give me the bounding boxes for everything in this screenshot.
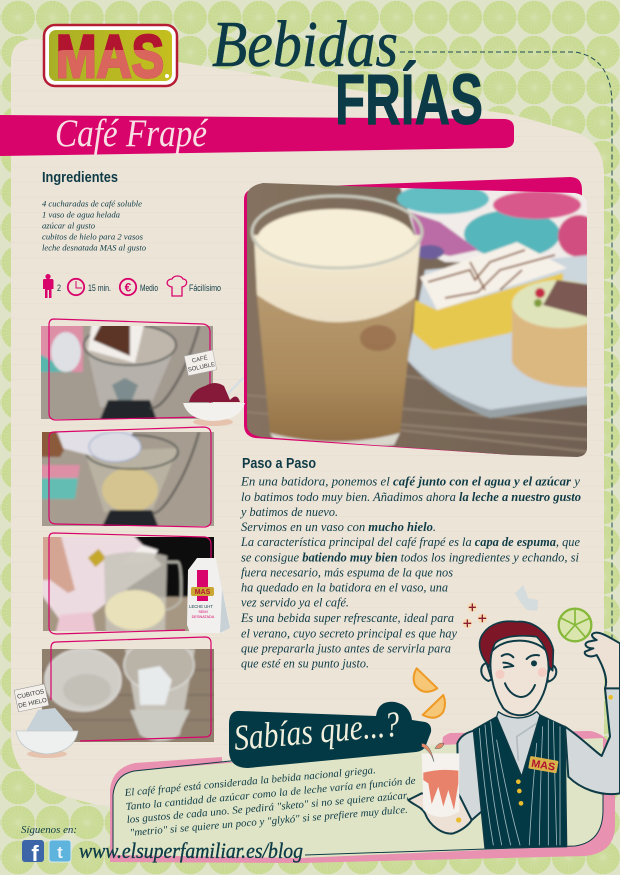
glass body: coffee — [256, 285, 416, 442]
note text: El café frapé está considerada la bebida nacional griega. — [123, 765, 376, 799]
napkin — [400, 186, 595, 265]
ingredients list: cubitos de hielo para 2 vasos — [42, 232, 144, 242]
milk carton: LECHE UHT — [189, 604, 213, 609]
pink frame — [244, 177, 582, 455]
right arm — [565, 687, 620, 794]
icon: orange slice — [423, 695, 445, 718]
milk carton: SEMI — [198, 610, 208, 614]
dashed route line — [400, 52, 612, 640]
heading: Sabías que: Sabías que...? — [232, 704, 401, 758]
note text — [123, 765, 416, 839]
step-by-step text: La característica principal del café frapé es la capa de espuma, que — [240, 535, 580, 549]
plate — [407, 255, 590, 410]
label: Síguenos en: Síguenos en: — [21, 824, 77, 836]
milk carton — [187, 558, 230, 633]
vest buttons — [516, 779, 523, 806]
recipe info icons: Medio — [140, 283, 158, 293]
step photo 2: pouring water — [37, 427, 219, 531]
step-by-step text: En una batidora, ponemos el café junto con el agua y el azúcar y — [240, 475, 580, 489]
ingredients list: leche desnatada MAS al gusto — [42, 242, 147, 252]
step-by-step text: que esté en su punto justo. — [241, 656, 369, 670]
step-by-step text: Servimos en un vaso con mucho hielo. — [241, 520, 436, 534]
icon: sugar cube — [515, 585, 538, 611]
icon: sparkles — [463, 603, 487, 628]
recipe info icons: 15 min. — [88, 283, 111, 293]
note text: Tanto la cantidad de azúcar como la de leche varía en función de — [125, 776, 416, 813]
recipe info icons: 2 — [57, 283, 61, 293]
website url: www.elsuperfamiliar.es/blog — [79, 838, 303, 863]
milk carton: DESNATADA — [192, 615, 215, 619]
pink backing — [110, 731, 615, 863]
step photo 1: coffee in blender — [36, 319, 218, 424]
MAS logo: MAS — [56, 23, 164, 90]
label: cubitos de hielo with bowl — [14, 684, 78, 758]
step frame — [49, 533, 211, 634]
step-by-step text: Es una bebida super refrescante, ideal para — [240, 611, 454, 625]
title: Bebidas: Bebidas — [212, 8, 398, 81]
round cake — [512, 305, 595, 387]
pale green note — [113, 738, 603, 858]
icon: person — [43, 274, 54, 298]
vest pinstripes — [479, 720, 560, 845]
label: cubitos de hielo with bowl: DE HIELO — [18, 697, 48, 710]
head — [481, 663, 556, 682]
ingredients list: 1 vaso de agua helada — [42, 210, 120, 220]
foam — [254, 235, 421, 322]
step frame — [51, 637, 211, 741]
label: café soluble with bowl: CAFÉ — [191, 354, 208, 365]
recipe info icons — [43, 274, 221, 298]
label: café soluble with bowl — [183, 350, 245, 426]
ingredients list: 4 cucharadas de café soluble — [42, 198, 142, 208]
step-by-step text: fuera necesario, más espuma de la que nos — [241, 566, 453, 580]
note text: los gustos de cada uno. Se pedirá "sketo" si no se quiere azúcar, — [126, 790, 409, 826]
ingredients list: azúcar al gusto — [42, 220, 96, 230]
dark title box — [229, 702, 431, 768]
step-by-step text: y batimos de nuevo. — [239, 505, 338, 519]
icon: facebook: f — [31, 841, 39, 866]
left sleeve — [457, 731, 483, 822]
panel: Sabías que box — [110, 702, 615, 863]
step photo 4: ice cubes — [37, 637, 219, 747]
step-by-step text: ha quedado en la batidora en el vaso, una — [241, 581, 448, 595]
hero panel: iced coffee photo with pink frame — [244, 177, 587, 457]
neck and collar — [505, 703, 535, 718]
label: cubitos de hielo with bowl: CUBITOS — [17, 688, 45, 701]
note text: "metrio" si se quiere un poco y "glykó" si se prefiere muy dulce. — [129, 805, 408, 839]
step frame — [49, 427, 211, 527]
milk carton: MAS — [195, 589, 211, 596]
name badge: MAS — [530, 758, 556, 774]
heading: Paso a Paso: Paso a Paso — [242, 456, 316, 472]
vest — [473, 715, 567, 848]
step-by-step text: vez servido ya el café. — [241, 596, 349, 610]
label: café soluble with bowl: SOLUBLE — [187, 362, 216, 374]
pink banner — [0, 115, 514, 156]
footer: social links — [21, 824, 77, 866]
icon: twitter: t — [57, 843, 63, 862]
icon: chef hat — [167, 276, 187, 296]
banner title: Café Frapé: Café Frapé — [55, 112, 208, 155]
character: winking waiter with drink — [408, 585, 620, 848]
heading: Ingredientes: Ingredientes — [42, 170, 118, 186]
step-by-step text: lo batimos todo muy bien. Añadimos ahora la leche a nuestro gusto — [241, 490, 581, 504]
icon: lime slice — [559, 609, 591, 641]
title: FRÍAS: FRÍAS — [335, 61, 483, 140]
hair — [480, 621, 553, 671]
hand and drink — [408, 793, 472, 834]
recipe info icons: Fácilísimo — [189, 283, 221, 293]
step-by-step text: que prepararla justo antes de servirla para — [241, 641, 451, 655]
icon: clock — [68, 279, 84, 295]
icon: orange slice — [414, 668, 437, 692]
step-by-step text: se consigue batiendo muy bien todos los ingredientes y echando, si — [241, 550, 580, 564]
icon: euro — [120, 279, 136, 295]
photo — [247, 183, 587, 457]
step-by-step text: el verano, cuyo secreto principal es que hay — [241, 626, 457, 640]
step-by-step text — [239, 475, 581, 670]
icon: euro: € — [125, 280, 132, 294]
MAS logo: MAS — [56, 23, 164, 90]
step frame — [49, 319, 210, 420]
ingredients list — [42, 198, 147, 252]
step photo 3: adding milk — [38, 532, 219, 636]
millefeuille — [413, 273, 563, 350]
